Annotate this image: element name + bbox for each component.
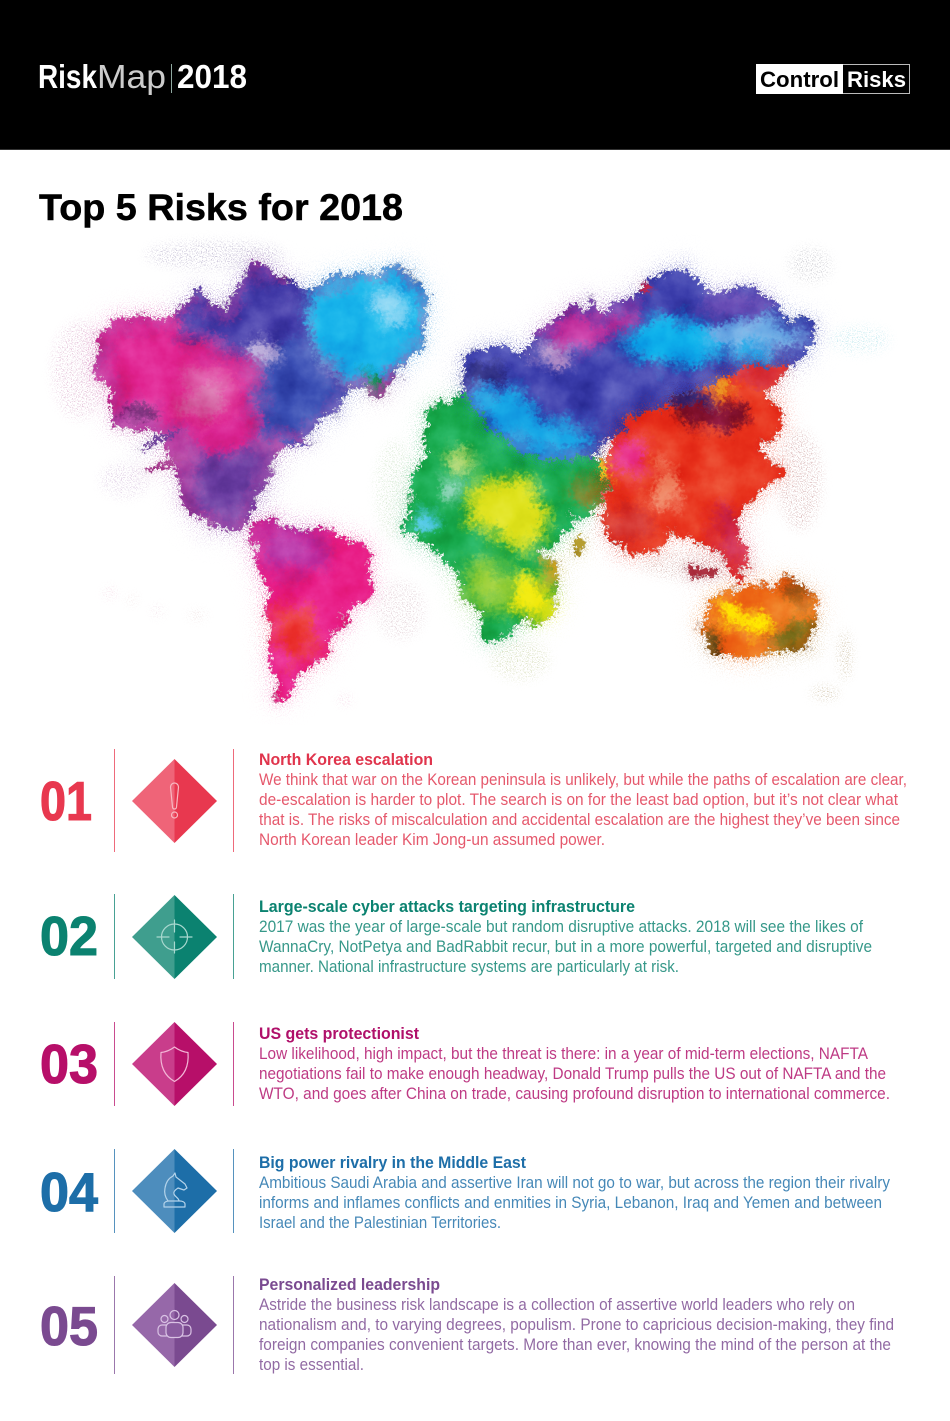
text: Personalized leadership [259,1276,894,1374]
text: Big power rivalry: informs and inflames conflicts and enmities in Syria, Lebanon, Iraq and Yemen and between [259,1194,882,1212]
number 05: 05 [40,1295,98,1357]
icon: crosshair in diamond [132,895,217,979]
loose dust around the continents [52,241,890,704]
number 02: 02 [40,905,98,967]
RiskMap 2018 wordmark [38,58,247,95]
RiskMap 2018 wordmark: Map [97,58,166,95]
text: North Korea escalation: We think that war on the Korean peninsula is unlikely, but while the paths of escalation are clear, [259,771,907,789]
icon: exclamation in diamond [132,759,217,843]
continent: Eurasia north [463,265,819,455]
spikes of thrown powder [130,270,315,482]
continent: Asia south [600,361,795,585]
icon: group of people in diamond [132,1283,217,1367]
text: North Korea escalation: North Korean leader Kim Jong-un assumed power. [259,831,605,849]
risk 03: US gets protectionist [40,1022,890,1106]
text: cyber attacks: 2017 was the year of large-scale but random disruptive attacks. 2018 will see the likes of [259,918,863,936]
Control Risks logo: Control [760,67,839,92]
risk 04: Big power rivalry [40,1149,891,1233]
text: North Korea escalation: that is. The risks of miscalculation and accidental escalation are the highest they’ve been since [259,811,900,829]
risk 05: Personalized leadership [40,1276,894,1374]
text: US gets protectionist: US gets protectionist [259,1025,420,1043]
number 01: 01 [40,770,92,832]
RiskMap 2018 wordmark: Risk [38,58,98,95]
text: North Korea escalation [259,751,907,849]
continent: Australia [701,581,815,662]
text: cyber attacks: manner. National infrastructure systems are particularly at risk. [259,958,679,976]
number 04: 04 [40,1161,98,1223]
text: Personalized leadership: top is essential. [259,1356,364,1374]
continent: Africa [405,388,610,642]
risk 01: North Korea escalation [40,749,907,852]
continent: South America [255,521,372,697]
icon: chess knight in diamond [132,1149,217,1233]
text: Big power rivalry: Ambitious Saudi Arabia and assertive Iran will not go to war, but across the region their rivalry [259,1174,891,1192]
risk 02: Large-scale cyber attacks [40,894,872,979]
text: Personalized leadership: Personalized leadership [259,1276,440,1294]
text: US gets protectionist: negotiations fail to make enough headway, Donald Trump pulls the US out of NAFTA and the [259,1065,886,1083]
text: US gets protectionist: WTO, and goes after China on trade, causing profound disruption to international commerce. [259,1085,890,1103]
text: North Korea escalation: de-escalation is harder to plot. The search is on for the least bad option, but it’s not clear what [259,791,898,809]
text: Personalized leadership: nationalism and, to varying degrees, populism. Prone to capricious decision-making, they find [259,1316,894,1334]
Control Risks logo [756,64,910,94]
text: Big power rivalry: Israel and the Palestinian Territories. [259,1214,501,1232]
text: Big power rivalry: Big power rivalry in the Middle East [259,1154,527,1172]
header band [0,0,950,150]
title: Top 5 Risks for 2018 [39,186,403,228]
text: cyber attacks: Large-scale cyber attacks targeting infrastructure [259,898,635,916]
text: Personalized leadership: Astride the business risk landscape is a collection of assertive world leaders who rely on [259,1296,855,1314]
RiskMap 2018 wordmark: 2018 [177,58,247,95]
text: North Korea escalation: North Korea escalation [259,751,433,769]
text: cyber attacks: WannaCry, NotPetya and BadRabbit recur, but in a more powerful, targeted and disruptive [259,938,872,956]
Control Risks logo: Risks [847,67,906,92]
continent: North America [97,253,427,527]
world map made of coloured powder [52,241,890,704]
text: Big power rivalry [259,1154,891,1232]
icon: shield in diamond [132,1022,217,1106]
text: Personalized leadership: foreign companies convenient targets. More than ever, knowing the mind of the person at the [259,1336,891,1354]
text: cyber attacks [259,898,872,976]
number 03: 03 [40,1033,98,1095]
text: US gets protectionist: Low likelihood, high impact, but the threat is there: in a year of mid-term elections, NAFTA [259,1045,868,1063]
text: US gets protectionist [259,1025,890,1103]
